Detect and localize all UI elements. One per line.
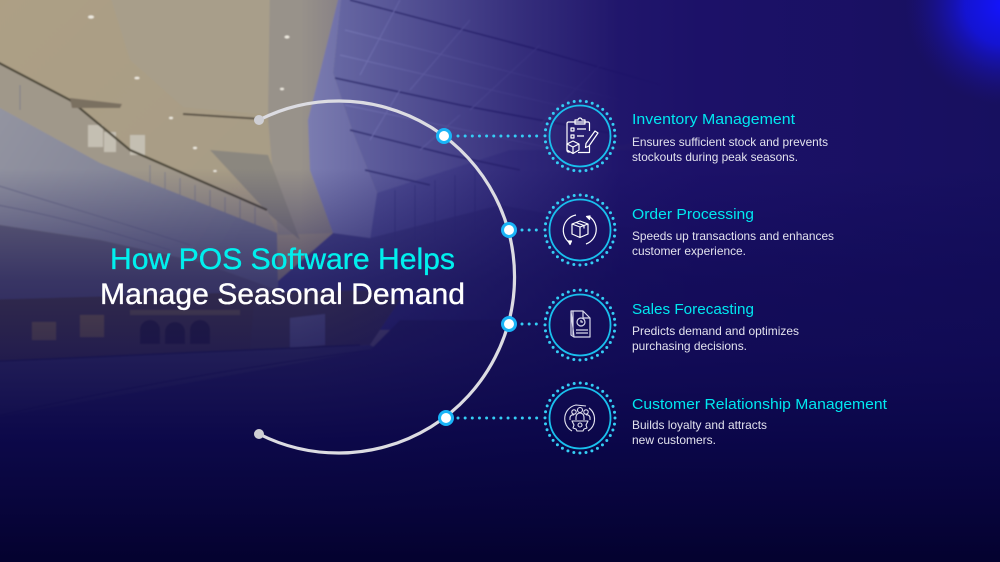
text: Order Processing (632, 206, 834, 258)
item: Inventory Management (436, 101, 828, 171)
text: Customer Relationship Management: new customers. (632, 433, 716, 447)
item: Customer Relationship Management (438, 383, 888, 453)
text: Sales Forecasting: Predicts demand and optimizes (632, 324, 799, 338)
text: Inventory Management: stockouts during peak seasons. (632, 150, 798, 164)
title: How POS Software Helps (110, 243, 455, 276)
text: Order Processing: customer experience. (632, 244, 746, 258)
icon ring (545, 101, 615, 171)
icon ring (545, 383, 615, 453)
connector (436, 128, 541, 144)
title (100, 243, 465, 311)
icon: people with gear and cycle (565, 405, 595, 431)
text: Inventory Management: Inventory Management (632, 111, 796, 128)
text: Customer Relationship Management: Customer Relationship Management (632, 396, 888, 413)
arc start dot (254, 115, 264, 125)
icon: report document with clock (571, 311, 590, 337)
icon: box with circular arrows (563, 215, 596, 244)
text: Inventory Management (632, 111, 828, 164)
text: Order Processing: Speeds up transactions and enhances (632, 229, 834, 243)
item: Order Processing (501, 195, 834, 265)
connector (501, 222, 541, 238)
icon: clipboard with box and pencil (567, 118, 598, 154)
icon ring (545, 290, 615, 360)
arc end dot (254, 429, 264, 439)
connector (438, 410, 541, 426)
main arc (254, 101, 515, 453)
item: Sales Forecasting (501, 290, 799, 360)
text: Sales Forecasting: purchasing decisions. (632, 339, 747, 353)
icon ring (545, 195, 615, 265)
text: Sales Forecasting: Sales Forecasting (632, 301, 754, 318)
text: Inventory Management: Ensures sufficient stock and prevents (632, 135, 828, 149)
text: Customer Relationship Management (632, 396, 888, 447)
text: Sales Forecasting (632, 301, 799, 353)
text: Order Processing: Order Processing (632, 206, 754, 223)
text: Customer Relationship Management: Builds loyalty and attracts (632, 418, 767, 432)
title: Manage Seasonal Demand (100, 278, 465, 311)
connector (501, 316, 541, 332)
